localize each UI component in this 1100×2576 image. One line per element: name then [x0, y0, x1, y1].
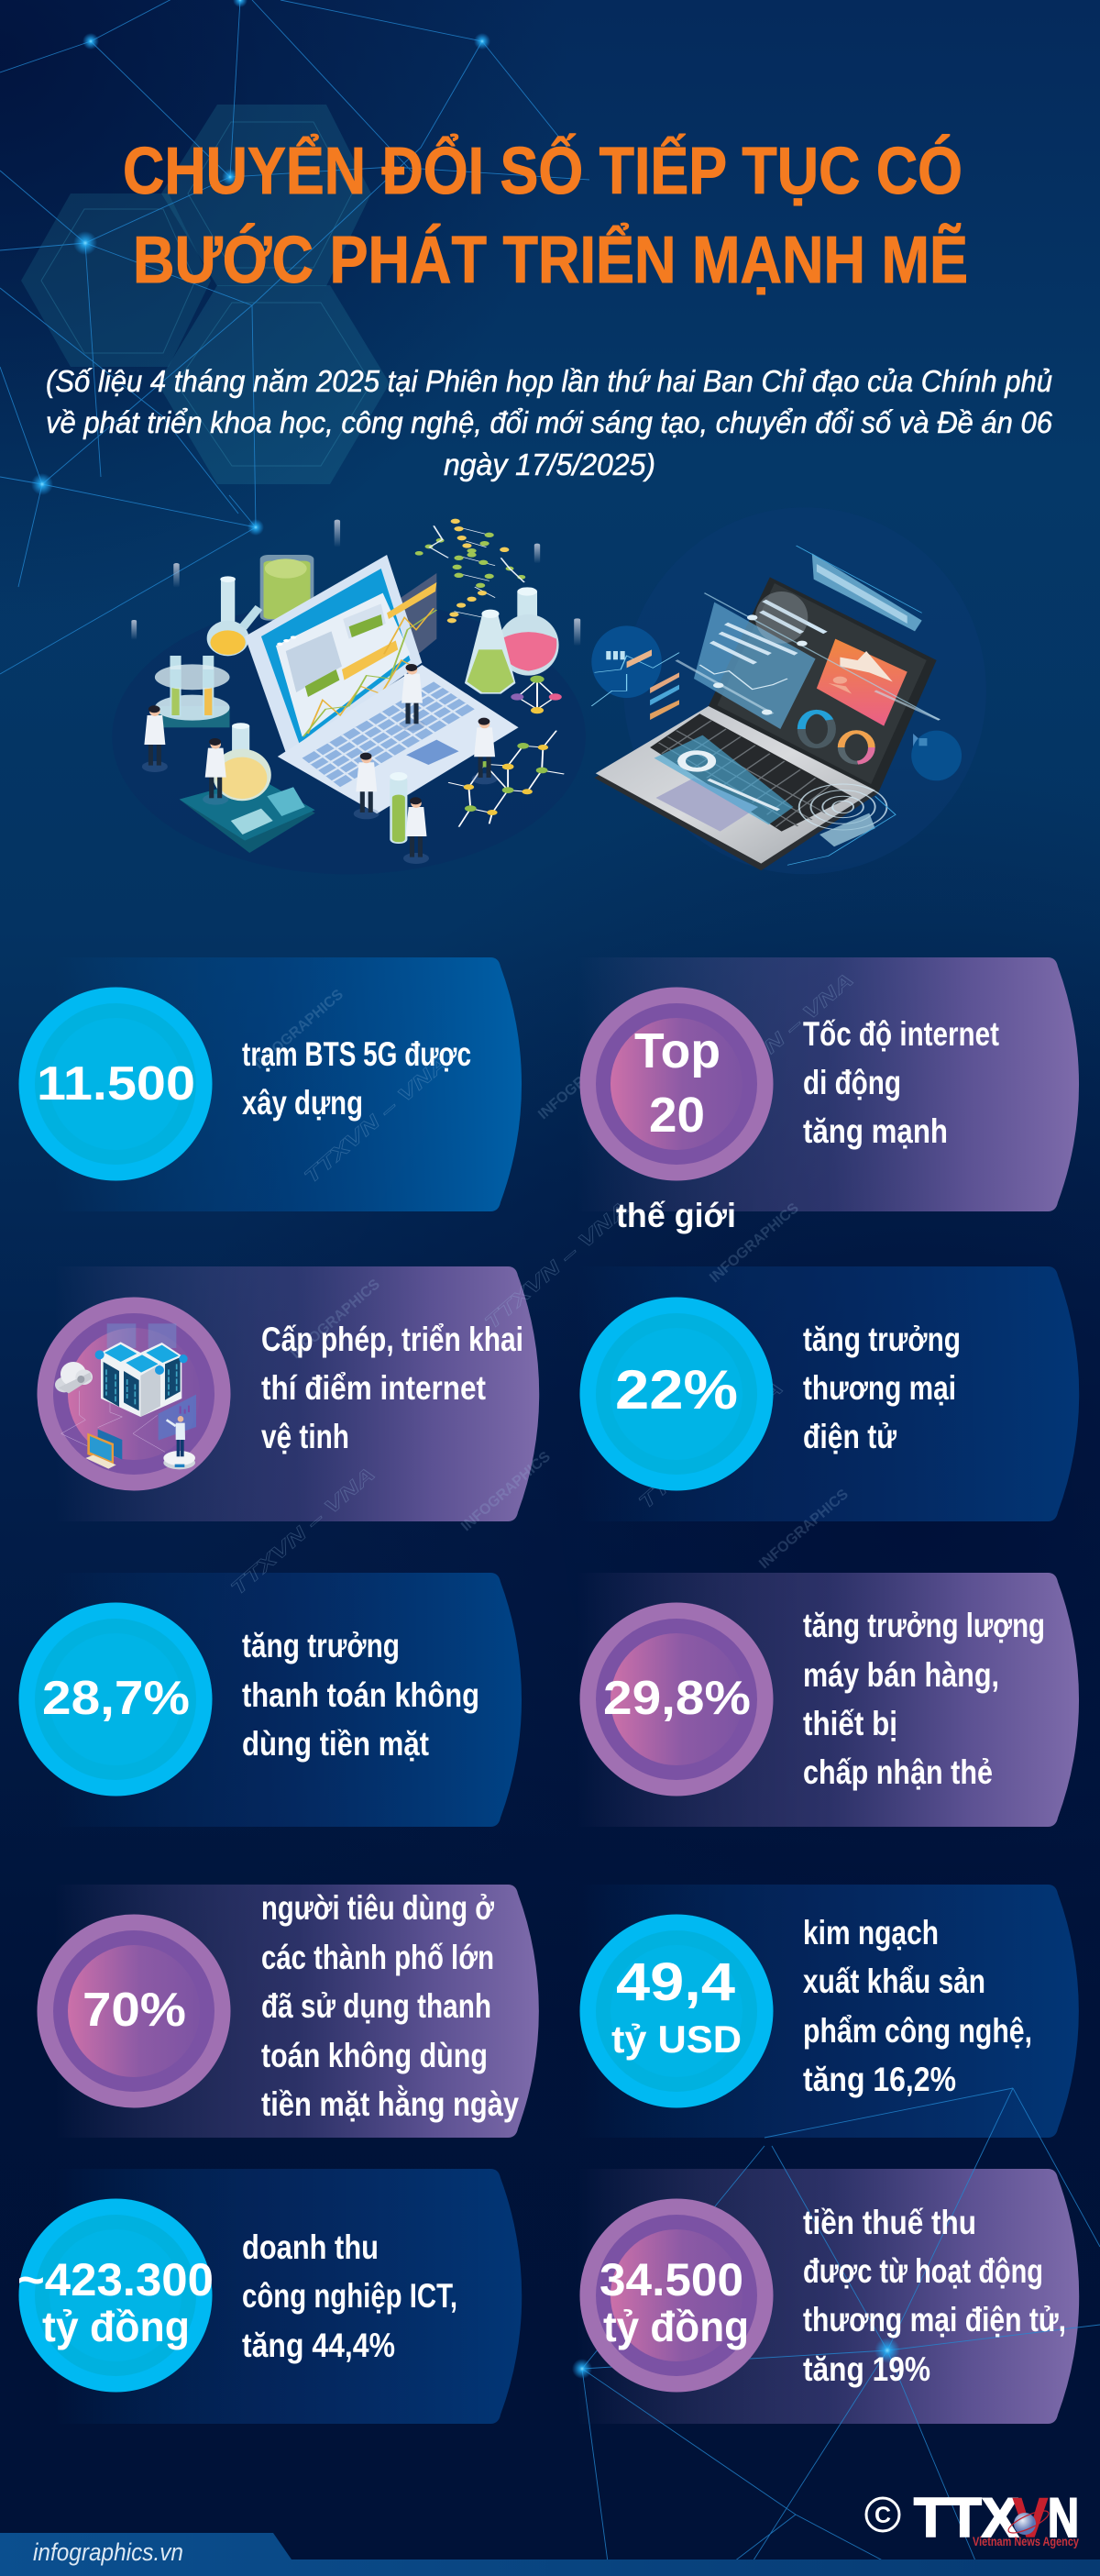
subtitle: ngày 17/5/2025) — [444, 448, 655, 481]
footer website: infographics.vn — [33, 2538, 183, 2566]
stat: 11.500: xây dựng — [242, 1084, 363, 1122]
watermarks: TTXVN – VNA — [481, 1198, 633, 1333]
subtitle — [46, 364, 1053, 481]
stat: ~423.300 tỷ đồng: tỷ đồng — [42, 2303, 190, 2350]
watermarks: TTXVN – VNA — [227, 1464, 380, 1599]
stat: satellite internet: vệ tinh — [261, 1418, 349, 1455]
screen panels — [694, 591, 825, 729]
side labels — [650, 672, 927, 752]
footer band — [0, 2533, 1100, 2576]
stat: Top 20 thế giới: 20 — [649, 1088, 705, 1143]
watermarks: INFOGRAPHICS — [535, 1037, 631, 1122]
laptop base — [595, 706, 878, 870]
stat: 34.500 tỷ đồng: 34.500 — [600, 2254, 743, 2305]
stat: 28,7%: tăng trưởng — [242, 1627, 400, 1664]
stat: 49,4 tỷ USD: tăng 16,2% — [803, 2061, 956, 2098]
card row 1 left — [55, 957, 522, 1211]
stat: 34.500 tỷ đồng: tỷ đồng — [603, 2303, 749, 2350]
stat: ~423.300 tỷ đồng: tăng 44,4% — [242, 2327, 395, 2364]
card row 5 left — [55, 2169, 522, 2424]
scientists — [142, 664, 498, 864]
stat: 29,8%: chấp nhận thẻ — [803, 1753, 993, 1791]
stat: 28,7%: thanh toán không — [242, 1676, 479, 1714]
yellow flask — [207, 576, 262, 656]
card row 3 left — [55, 1573, 522, 1827]
stat: 70% — [37, 1889, 519, 2123]
hexagonal molecule — [448, 731, 564, 827]
stat: 29,8%: thiết bị — [803, 1705, 897, 1742]
orange card — [817, 639, 908, 726]
stat: 11.500 — [18, 987, 471, 1181]
logo: TTXVN: V — [1013, 2487, 1048, 2548]
stat: 29,8%: 29,8% — [603, 1672, 751, 1725]
stat: Top 20 thế giới: tăng mạnh — [803, 1112, 948, 1150]
stat: 70%: các thành phố lớn — [261, 1939, 494, 1976]
stat: 70%: tiền mặt hằng ngày — [261, 2084, 519, 2123]
stat: 49,4 tỷ USD: 49,4 — [616, 1952, 735, 2012]
card row 4 left — [55, 1885, 539, 2138]
stat: 34.500 tỷ đồng — [579, 2199, 1066, 2392]
stat: 22%: điện tử — [803, 1418, 896, 1455]
stat: 28,7% — [18, 1603, 479, 1796]
laptop base — [278, 665, 519, 813]
logo: TTXVN: TTX — [914, 2487, 1018, 2548]
stat: 11.500: 11.500 — [37, 1057, 195, 1111]
card row 1 right — [578, 957, 1079, 1211]
donut charts — [801, 712, 872, 763]
conical flask — [465, 610, 515, 694]
stat: ~423.300 tỷ đồng: doanh thu — [242, 2228, 379, 2266]
illustration: science laptop — [112, 519, 586, 874]
watermarks: TTXVN – VNA — [706, 969, 858, 1105]
stat: 22% — [579, 1297, 961, 1491]
stat: ~423.300 tỷ đồng — [17, 2199, 457, 2392]
logo: TTXVN — [866, 2487, 1079, 2548]
top right panel — [797, 546, 922, 631]
watermarks: INFOGRAPHICS — [707, 1200, 802, 1286]
small data bubble — [911, 731, 962, 780]
watermarks: TTXVN – VNA — [635, 1377, 787, 1513]
stat: 28,7%: dùng tiền mặt — [242, 1725, 429, 1763]
title: CHUYỂN ĐỔI SỐ TIẾP TỤC CÓ — [123, 133, 962, 208]
stat: 34.500 tỷ đồng: tăng 19% — [803, 2350, 930, 2388]
stat: 70%: đã sử dụng thanh — [261, 1987, 491, 2025]
scale with flask — [180, 723, 315, 853]
stat: 70%: người tiêu dùng ở — [261, 1889, 495, 1927]
icon: data servers — [55, 1323, 196, 1469]
stat: 49,4 tỷ USD: tỷ USD — [611, 2018, 742, 2061]
subtitle: (Số liệu 4 tháng năm 2025 tại Phiên họp lần thứ hai Ban Chỉ đạo của Chính phủ — [46, 364, 1052, 398]
stat: 29,8%: tăng trưởng lượng — [803, 1607, 1045, 1644]
stat: 49,4 tỷ USD: xuất khẩu sản — [803, 1962, 985, 2000]
stat: 70%: 70% — [82, 1984, 186, 2037]
card row 2 left — [55, 1266, 539, 1521]
pink flask — [498, 587, 559, 676]
concentric signal — [799, 784, 886, 830]
title: BƯỚC PHÁT TRIỂN MẠNH MẼ — [133, 223, 968, 297]
watermarks: INFOGRAPHICS — [756, 1487, 852, 1572]
stat: 29,8%: máy bán hàng, — [803, 1656, 999, 1694]
lid — [709, 577, 937, 793]
stat: 49,4 tỷ USD: kim ngạch — [803, 1914, 939, 1951]
test tube rack — [155, 656, 230, 727]
stat: Top 20 thế giới — [579, 987, 999, 1234]
round data bubble — [591, 625, 679, 706]
watermarks: INFOGRAPHICS — [251, 987, 346, 1072]
illustration: tablet laptop — [591, 507, 986, 874]
stat: Top 20 thế giới: Top — [634, 1023, 720, 1078]
card row 5 right — [578, 2169, 1079, 2424]
stat: Top 20 thế giới: Tốc độ internet — [803, 1015, 999, 1053]
logo: TTXVN: C — [874, 2503, 891, 2528]
overlay lines — [676, 593, 940, 720]
subtitle: về phát triển khoa học, công nghệ, đổi mới sáng tạo, chuyển đổi số và Đề án 06 — [46, 405, 1053, 439]
card row 3 right — [578, 1573, 1079, 1827]
DNA — [415, 519, 525, 623]
stat: ~423.300 tỷ đồng: ~423.300 — [17, 2254, 214, 2305]
card row 2 right — [578, 1266, 1079, 1521]
stat: satellite internet: Cấp phép, triển khai — [261, 1321, 523, 1358]
stat: 22%: 22% — [615, 1359, 738, 1421]
stat: ~423.300 tỷ đồng: công nghiệp ICT, — [242, 2277, 457, 2315]
stat: 11.500: trạm BTS 5G được — [242, 1035, 471, 1073]
stat: 34.500 tỷ đồng: tiền thuế thu — [803, 2204, 976, 2241]
title — [123, 133, 968, 297]
stat: 28,7%: 28,7% — [42, 1672, 190, 1725]
watermarks: TTXVN – VNA — [301, 1052, 453, 1188]
watermarks — [227, 969, 858, 1599]
logo: TTXVN: N — [1048, 2487, 1079, 2548]
green test tube — [390, 772, 407, 844]
network lines: top left — [0, 0, 589, 674]
stat: 29,8% — [579, 1603, 1045, 1796]
network lines: bottom right — [572, 2088, 1100, 2576]
stat: 22%: tăng trưởng — [803, 1321, 961, 1358]
card row 4 right — [578, 1885, 1079, 2138]
stat: Top 20 thế giới: thế giới — [616, 1197, 736, 1234]
stat: satellite internet — [37, 1297, 523, 1491]
green beaker — [260, 555, 314, 621]
molecule — [511, 676, 562, 713]
watermarks: INFOGRAPHICS — [288, 1277, 383, 1362]
watermarks: INFOGRAPHICS — [458, 1449, 554, 1534]
hexagon decoration — [21, 105, 390, 484]
laptop lid — [245, 555, 436, 757]
device box — [787, 796, 896, 865]
stat: 49,4 tỷ USD: phẩm công nghệ, — [803, 2012, 1032, 2050]
stat: 70%: toán không dùng — [261, 2037, 488, 2074]
stat: 49,4 tỷ USD — [579, 1914, 1032, 2107]
stat: 22%: thương mại — [803, 1369, 956, 1407]
stat: satellite internet: thí điểm internet — [261, 1369, 486, 1407]
stat: Top 20 thế giới: di động — [803, 1064, 901, 1101]
